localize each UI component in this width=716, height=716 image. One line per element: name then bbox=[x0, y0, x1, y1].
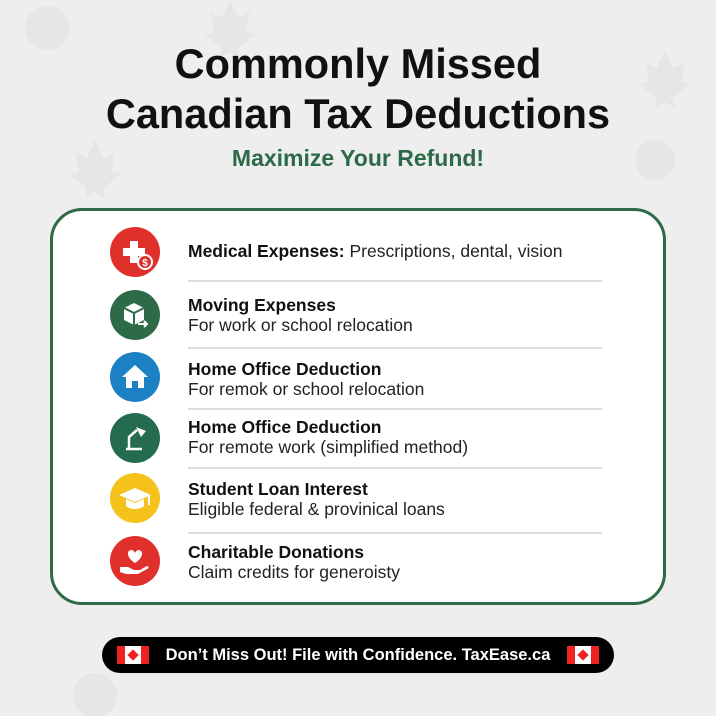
text: student loan bbox=[188, 479, 445, 519]
text: charity: Charitable Donations bbox=[188, 542, 364, 562]
text: home office 2: Home Office Deduction bbox=[188, 417, 382, 437]
icon: lamp bbox=[110, 413, 160, 463]
icon: medical: $ bbox=[142, 258, 148, 269]
footer bar bbox=[102, 637, 614, 673]
text: home office 1: Home Office Deduction bbox=[188, 359, 382, 379]
text: home office 2: For remote work (simplified method) bbox=[188, 437, 468, 457]
text: moving: Moving Expenses bbox=[188, 295, 336, 315]
text: student loan: Eligible federal & provinical loans bbox=[188, 499, 445, 519]
title: Canadian Tax Deductions bbox=[106, 90, 610, 137]
icon: medical bbox=[110, 227, 160, 277]
text: home office 1 bbox=[188, 359, 424, 399]
text: charity: Claim credits for generoisty bbox=[188, 562, 400, 582]
icon: charity bbox=[110, 536, 160, 586]
text: medical: Medical Expenses: Prescriptions, dental, vision bbox=[188, 241, 562, 261]
panel: deductions bbox=[50, 208, 666, 605]
icon: flag left bbox=[117, 646, 149, 664]
icon: home bbox=[110, 352, 160, 402]
text: home office 1: For remok or school relocation bbox=[188, 379, 424, 399]
icon: flag right bbox=[567, 646, 599, 664]
icon: moving bbox=[110, 290, 160, 340]
text: moving: For work or school relocation bbox=[188, 315, 413, 335]
text: home office 2 bbox=[188, 417, 468, 457]
icon: graduation bbox=[110, 473, 160, 523]
title: Commonly Missed bbox=[175, 40, 541, 87]
title bbox=[106, 40, 610, 137]
subtitle: Maximize Your Refund! bbox=[232, 145, 484, 171]
text: charity bbox=[188, 542, 400, 582]
text: student loan: Student Loan Interest bbox=[188, 479, 368, 499]
text: moving bbox=[188, 295, 413, 335]
footer bar: Don’t Miss Out! File with Confidence. TaxEase.ca bbox=[166, 646, 550, 664]
